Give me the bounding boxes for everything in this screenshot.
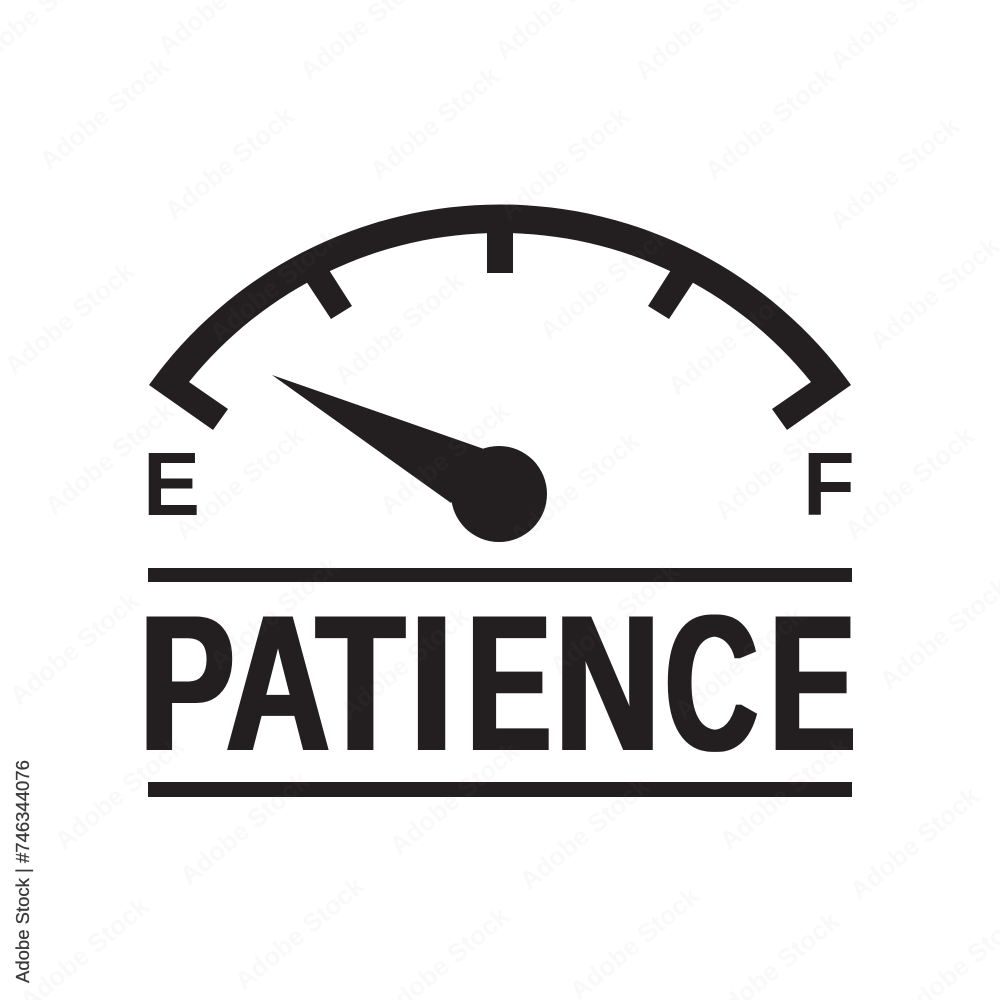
watermark text pattern: Adobe Stock: [204, 550, 345, 676]
watermark text pattern: Adobe Stock: [699, 60, 840, 186]
watermark text pattern: Adobe Stock: [709, 400, 850, 526]
watermark text pattern: Adobe Stock: [204, 222, 345, 348]
watermark text pattern: Adobe Stock: [364, 60, 505, 186]
watermark text pattern: Adobe Stock: [504, 425, 645, 551]
title: PATIENCE: N: [555, 576, 660, 792]
bottom divider bar: [148, 782, 852, 797]
title: PATIENCE: E: [770, 575, 856, 791]
title: PATIENCE: T: [316, 576, 405, 792]
watermark text pattern: Adobe Stock: [229, 870, 370, 996]
title: PATIENCE: E: [467, 575, 551, 792]
stock id vertical text: Adobe Stock | #746344076: [12, 760, 33, 983]
gauge needle pointing near empty: [272, 375, 547, 542]
watermark text pattern: Adobe Stock: [824, 110, 965, 236]
watermark text pattern: Adobe Stock: [544, 555, 685, 681]
watermark text pattern: Adobe Stock: [844, 780, 985, 906]
watermark text pattern: Adobe Stock: [374, 395, 515, 521]
watermark text pattern: Adobe Stock: [34, 50, 175, 176]
watermark text pattern: Adobe Stock: [839, 420, 980, 546]
watermark text pattern: Adobe Stock: [384, 735, 525, 861]
watermark text pattern: Adobe Stock: [534, 220, 675, 346]
watermark text pattern: Adobe Stock: [0, 255, 140, 381]
watermark text pattern: Adobe Stock: [662, 275, 803, 401]
title: PATIENCE: P: [140, 576, 235, 792]
watermark text pattern: Adobe Stock: [159, 100, 300, 226]
label: E (empty): E: [143, 434, 200, 534]
watermark text pattern: Adobe Stock: [669, 600, 810, 726]
title: PATIENCE: I: [410, 576, 453, 792]
watermark text pattern: Adobe Stock: [514, 770, 655, 896]
top divider bar: [148, 568, 852, 582]
title: PATIENCE: [140, 575, 856, 792]
watermark text pattern: Adobe Stock: [169, 420, 310, 546]
watermark text pattern: Adobe Stock: [4, 585, 145, 711]
watermark text pattern: Adobe Stock: [334, 600, 475, 726]
watermark text pattern: Adobe Stock: [714, 730, 855, 856]
watermark text pattern: Adobe Stock: [329, 265, 470, 391]
label: F (full): F: [803, 434, 855, 535]
title: PATIENCE: A: [226, 575, 330, 792]
watermark text pattern: Adobe Stock: [494, 100, 635, 226]
gauge dial: arc with end brackets: [149, 204, 851, 430]
gauge tick marks: [300, 225, 700, 319]
watermark text pattern: Adobe Stock: [49, 730, 190, 856]
title: PATIENCE: C: [665, 575, 758, 791]
watermark text pattern: Adobe Stock: [39, 395, 180, 521]
watermark text pattern: Adobe Stock: [174, 765, 315, 891]
